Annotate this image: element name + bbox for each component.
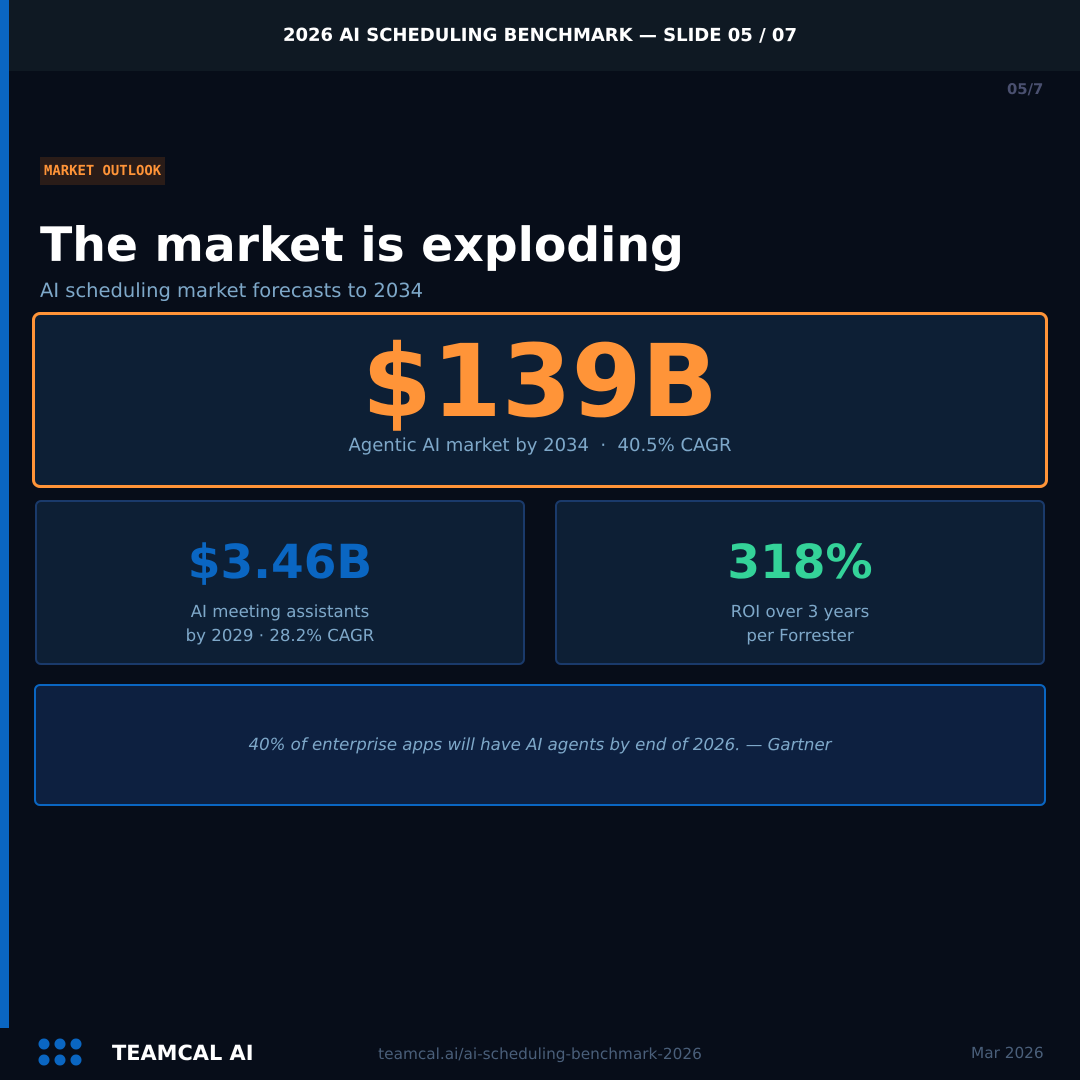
stat value: 318% <box>727 535 873 590</box>
stat caption <box>186 602 374 645</box>
footer url: teamcal.ai/ai-scheduling-benchmark-2026 <box>378 1045 702 1063</box>
hero caption: Agentic AI market by 2034 · 40.5% CAGR <box>348 434 731 456</box>
subtitle: AI scheduling market forecasts to 2034 <box>40 279 423 302</box>
panel: meeting assistants <box>35 500 525 665</box>
quote text: 40% of enterprise apps will have AI agents by end of 2026. — Gartner <box>249 735 831 754</box>
stat caption: ROI over 3 years <box>731 602 869 621</box>
hero number: $139B <box>362 323 718 440</box>
footer brand: TEAMCAL AI <box>112 1041 254 1065</box>
title: The market is exploding <box>40 218 684 273</box>
footer date: Mar 2026 <box>971 1044 1044 1062</box>
panel: ROI <box>555 500 1045 665</box>
panel: Gartner quote <box>34 684 1046 806</box>
stat caption: by 2029 · 28.2% CAGR <box>186 626 374 645</box>
panel: hero stat <box>32 312 1048 488</box>
stat caption: AI meeting assistants <box>191 602 369 621</box>
stat value: $3.46B <box>188 535 372 590</box>
stat caption: per Forrester <box>746 626 854 645</box>
stat caption <box>731 602 869 645</box>
footer logo dots <box>38 1038 82 1066</box>
tag: market outlook <box>40 157 165 185</box>
left accent bar <box>0 0 9 1028</box>
page number: 05/7 <box>1007 81 1043 98</box>
header bar <box>0 0 1080 71</box>
tag label: MARKET OUTLOOK <box>44 162 161 179</box>
header title: 2026 AI SCHEDULING BENCHMARK — SLIDE 05 / 07 <box>283 25 797 46</box>
